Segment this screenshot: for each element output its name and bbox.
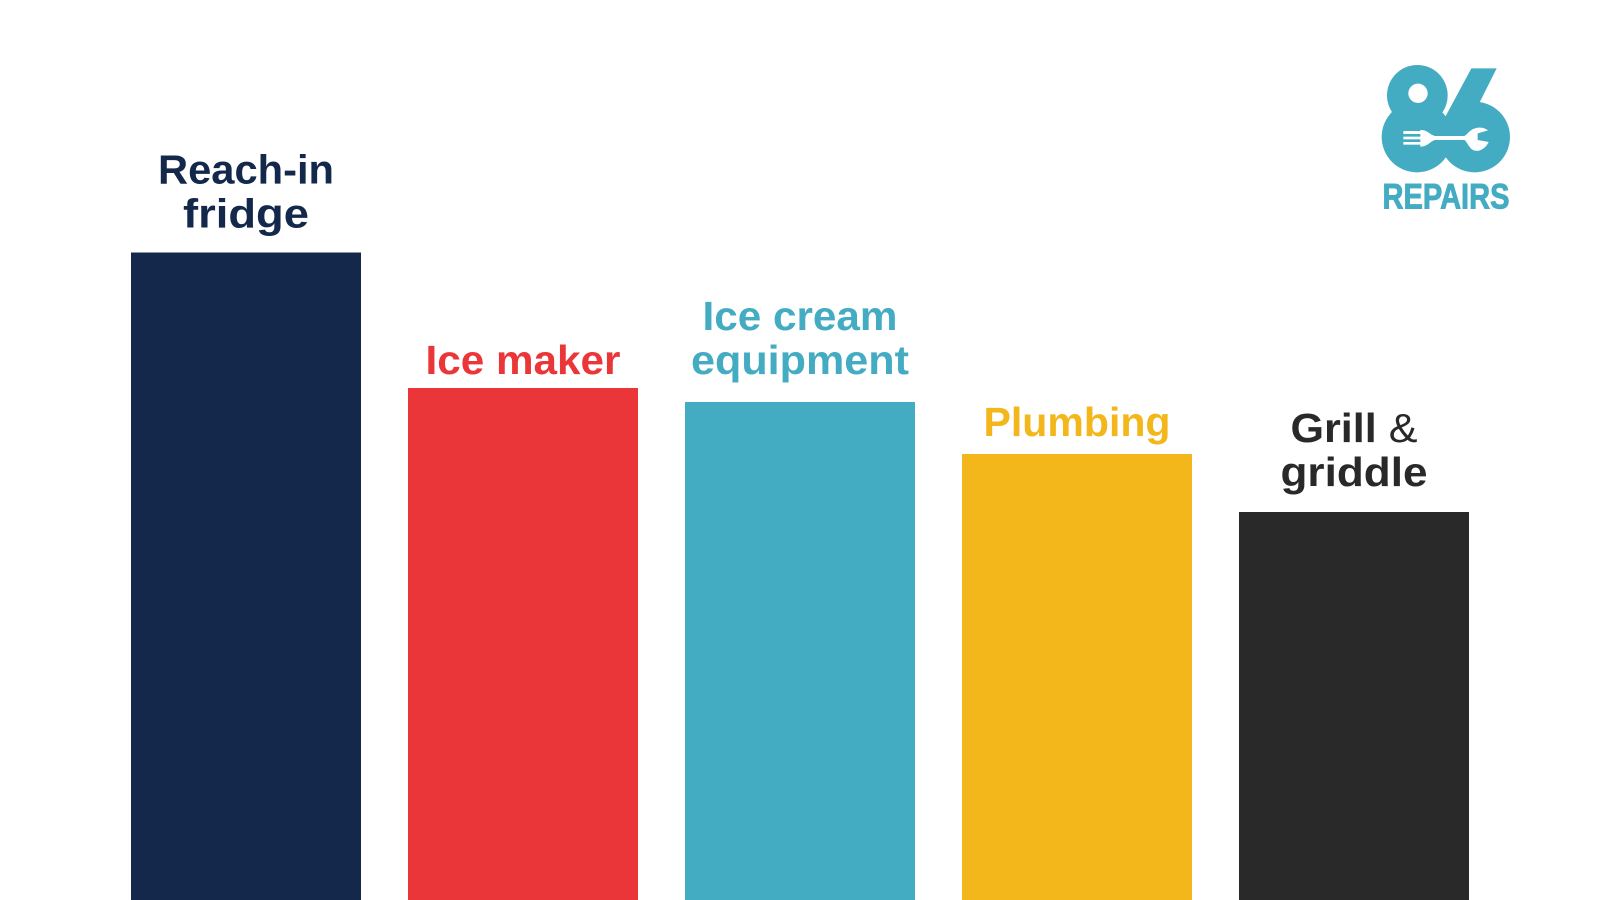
label: Grill & griddle [1280, 405, 1428, 495]
bar: Grill and griddle [1239, 512, 1469, 900]
bar group: Ice cream equipment [685, 293, 915, 900]
label: Plumbing: Plumbing [984, 399, 1170, 445]
label: Reach-in fridge: Reach-in [158, 146, 334, 192]
label: Ice cream equipment: equipment [691, 337, 909, 383]
bar: Ice maker [408, 388, 638, 900]
bar: Ice cream equipment [685, 402, 915, 900]
label: Ice cream equipment [691, 293, 909, 383]
label: Grill & griddle: Grill & [1290, 405, 1418, 451]
label: Ice cream equipment: Ice cream [702, 293, 898, 339]
icon: 86 mark [1382, 65, 1510, 172]
bar: Reach-in fridge [131, 252, 361, 900]
label: Reach-in fridge: fridge [183, 190, 309, 236]
logo wordmark: REPAIRS [1382, 178, 1510, 216]
bar: Plumbing [962, 454, 1192, 900]
bar group: Ice maker [408, 337, 638, 900]
label: Reach-in fridge [158, 146, 334, 236]
logo: 86 Repairs [1382, 65, 1510, 216]
bar group: Plumbing [962, 399, 1192, 900]
bar group: Reach-in fridge [131, 146, 361, 900]
label: Grill & griddle: griddle [1280, 449, 1428, 495]
label: Ice maker: Ice maker [426, 337, 621, 383]
icon: fork and wrench [1403, 128, 1489, 151]
bar group: Grill and griddle [1239, 405, 1469, 900]
